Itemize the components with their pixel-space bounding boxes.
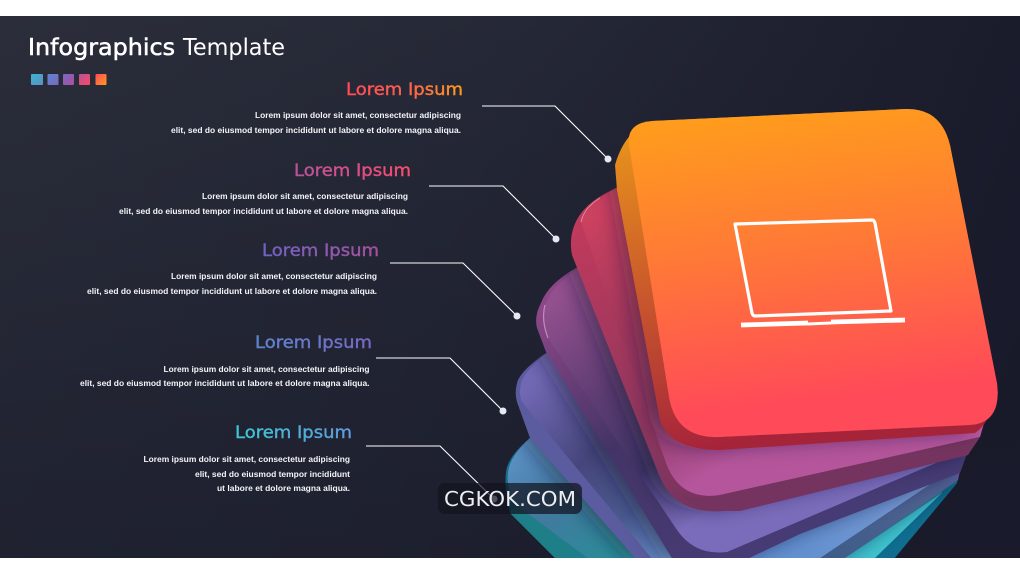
card 1 side: [615, 109, 998, 450]
colour legend squares: [31, 74, 106, 85]
text block 3: Lorem Ipsum: [262, 241, 379, 261]
text block 3: Lorem ipsum dolor sit amet, consectetur adipiscing: [171, 271, 377, 281]
card 3: purple: [536, 268, 966, 558]
leader line 2: [429, 186, 560, 242]
card 1: orange front card: [615, 109, 998, 450]
text block 1: [171, 80, 463, 135]
title: Template: [182, 33, 285, 61]
text block 5: ut labore et dolore magna aliqua.: [217, 483, 350, 493]
shadow on card 2: [600, 188, 975, 459]
watermark: [438, 483, 582, 514]
title: [28, 33, 285, 61]
stacked cards illustration: [506, 109, 998, 560]
text block 5: elit, sed do eiusmod tempor incididunt: [195, 469, 350, 479]
text block 5: Lorem Ipsum: [235, 423, 352, 443]
card 1 face: [629, 109, 998, 437]
text block 4: elit, sed do eiusmod tempor incididunt ut labore et dolore magna aliqua.: [80, 378, 370, 388]
leader line 5: [366, 446, 498, 502]
leader line 3: [390, 263, 520, 320]
text block 2: [119, 161, 411, 216]
text block 2: Lorem ipsum dolor sit amet, consectetur adipiscing: [202, 191, 408, 201]
leader line 4: [376, 358, 506, 414]
text block 2: Lorem Ipsum: [294, 161, 411, 181]
shadow on card 3: [562, 268, 959, 522]
card 5: teal: [506, 438, 958, 558]
shadow on card 5: [518, 438, 957, 558]
text block 4: Lorem ipsum dolor sit amet, consectetur adipiscing: [164, 364, 370, 374]
card 4: blue: [516, 352, 960, 558]
watermark: CGKOK.COM: [444, 487, 576, 511]
text block 1: elit, sed do eiusmod tempor incididunt ut labore et dolore magna aliqua.: [171, 125, 461, 135]
card 2: crimson: [571, 170, 985, 511]
text block 3: [87, 241, 379, 296]
text block 5: [144, 423, 352, 493]
text block 1: Lorem ipsum dolor sit amet, consectetur adipiscing: [255, 110, 461, 120]
text block 4: [80, 333, 372, 388]
leader line 1: [482, 106, 612, 162]
icon: laptop: [735, 220, 905, 325]
text block 5: Lorem ipsum dolor sit amet, consectetur adipiscing: [144, 454, 350, 464]
text block 4: Lorem Ipsum: [255, 333, 372, 353]
title: Infographics: [28, 33, 175, 61]
text block 2: elit, sed do eiusmod tempor incididunt ut labore et dolore magna aliqua.: [119, 206, 408, 216]
text block 1: Lorem Ipsum: [346, 80, 463, 100]
text block 3: elit, sed do eiusmod tempor incididunt ut labore et dolore magna aliqua.: [87, 286, 377, 296]
shadow on card 4: [532, 353, 959, 558]
